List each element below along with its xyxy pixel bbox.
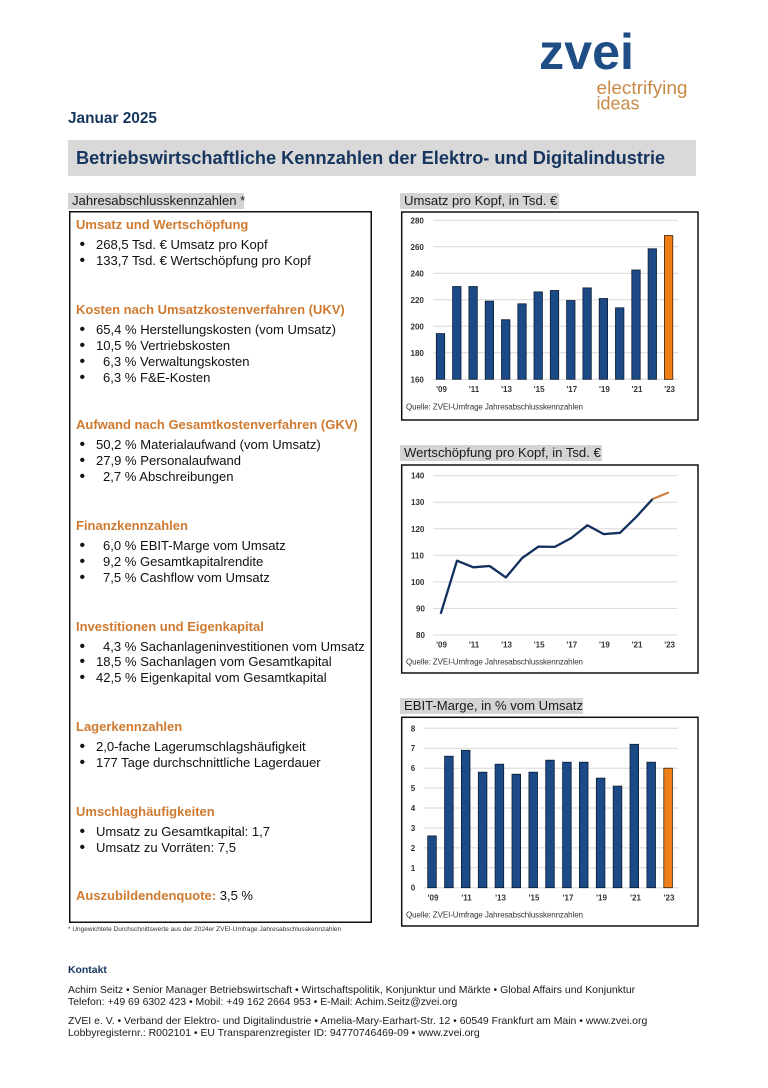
chart: Wertschöpfung pro Kopf line chart: '19 [599,640,610,650]
section: Finanzkennzahlen: 6,0 % EBIT-Marge vom Umsatz [103,538,286,553]
section: Kosten nach Umsatzkostenverfahren: • [80,337,85,354]
chart: EBIT-Marge bar chart: 5 [411,784,416,793]
logo: zvei electrifying ideas: ideas [596,92,640,114]
section: Finanzkennzahlen: 9,2 % Gesamtkapitalrendite [103,554,263,569]
section: Auszubildendenquote: Auszubildendenquote: 3,5 % [76,888,253,903]
section: Kosten nach Umsatzkostenverfahren: • [80,321,85,338]
section: Umsatz und Wertschöpfung: • [80,236,85,253]
chart: EBIT-Marge bar chart: '09 [428,894,439,902]
contact heading: Kontakt [68,965,107,976]
section: Kosten nach Umsatzkostenverfahren: 65,4 % Herstellungskosten (vom Umsatz) [96,322,336,337]
chart: EBIT-Marge bar chart: '21 [630,894,641,902]
chart: EBIT-Marge bar chart [400,716,699,927]
chart: Wertschöpfung pro Kopf line chart: '11 [469,640,480,650]
chart: EBIT-Marge bar chart: 1 [411,864,416,873]
section: Finanzkennzahlen: • [80,537,85,554]
chart: Wertschöpfung pro Kopf line chart: '23 [664,640,676,650]
section: Finanzkennzahlen: 7,5 % Cashflow vom Umsatz [103,570,270,585]
chart: Umsatz pro Kopf bar chart: '21 [632,385,643,394]
chart: EBIT-Marge bar chart: 3 [411,824,416,833]
chart: Umsatz pro Kopf bar chart: '11 [469,385,480,394]
chart: Umsatz pro Kopf bar chart: 240 [410,269,424,278]
section: Umsatz und Wertschöpfung: 133,7 Tsd. € Wertschöpfung pro Kopf [96,253,311,268]
section: Umschlaghäufigkeiten [76,804,270,856]
section: Investitionen und Eigenkapital: Investitionen und Eigenkapital [76,618,264,634]
section: Umschlaghäufigkeiten: • [80,823,85,840]
heading: Umsatz pro Kopf: Umsatz pro Kopf, in Tsd. € [404,193,557,208]
chart: EBIT-Marge bar chart: 4 [411,804,416,813]
section: Finanzkennzahlen: • [80,569,85,586]
section: Kosten nach Umsatzkostenverfahren: Kosten nach Umsatzkostenverfahren (UKV) [76,302,345,317]
section: Umsatz und Wertschöpfung: Umsatz und Wertschöpfung [76,217,248,232]
section: Aufwand nach Gesamtkostenverfahren: Aufwand nach Gesamtkostenverfahren (GKV) [76,417,358,432]
section: Lagerkennzahlen: Lagerkennzahlen [76,719,182,734]
section: Aufwand nach Gesamtkostenverfahren: • [80,436,85,453]
logo: zvei electrifying ideas: zvei [539,24,634,80]
section: Finanzkennzahlen: Finanzkennzahlen [76,518,188,533]
chart: Wertschöpfung pro Kopf line chart: 90 [416,604,425,613]
section: Umschlaghäufigkeiten: • [80,839,85,856]
section: Umschlaghäufigkeiten: Umschlaghäufigkeiten [76,804,215,819]
chart: Umsatz pro Kopf bar chart: 260 [410,243,424,252]
contact details [68,984,635,1008]
chart: Umsatz pro Kopf bar chart: '13 [501,385,512,394]
section: Investitionen und Eigenkapital [76,618,365,686]
chart: Wertschöpfung pro Kopf line chart: '15 [534,640,545,650]
chart: Umsatz pro Kopf bar chart: 200 [410,322,424,331]
chart: Umsatz pro Kopf bar chart: '17 [566,385,578,394]
chart: Wertschöpfung pro Kopf line chart: 140 [411,472,425,481]
section: Lagerkennzahlen: • [80,738,85,755]
chart: EBIT-Marge bar chart: 0 [411,884,416,893]
chart: Wertschöpfung pro Kopf line chart: '21 [632,640,643,650]
organisation details: Lobbyregisternr.: R002101 • EU Transparenzregister ID: 94770746469-09 • www.zvei.org [68,1028,480,1039]
section: Aufwand nach Gesamtkostenverfahren [76,417,358,485]
section: Lagerkennzahlen: • [80,754,85,771]
section: Investitionen und Eigenkapital: 18,5 % Sachanlagen vom Gesamtkapital [96,654,332,669]
chart: Wertschöpfung pro Kopf line chart: 120 [411,525,425,534]
heading: Jahresabschlusskennzahlen: Jahresabschlusskennzahlen * [72,193,245,208]
section: Aufwand nach Gesamtkostenverfahren: • [80,452,85,469]
section: Investitionen und Eigenkapital: • [80,653,85,670]
chart: Wertschöpfung pro Kopf line chart: Quelle: ZVEI-Umfrage Jahresabschlusskennzahlen [406,658,583,666]
section: Aufwand nach Gesamtkostenverfahren: 2,7 % Abschreibungen [103,469,234,484]
section: Lagerkennzahlen [76,719,321,771]
section: Kosten nach Umsatzkostenverfahren: • [80,353,85,370]
section: Aufwand nach Gesamtkostenverfahren: 27,9 % Personalaufwand [96,453,241,468]
chart: EBIT-Marge bar chart: '11 [461,894,472,902]
chart: Umsatz pro Kopf bar chart: 220 [410,296,424,305]
section: Investitionen und Eigenkapital: 4,3 % Sachanlageninvestitionen vom Umsatz [103,638,365,654]
section: Finanzkennzahlen [76,518,286,586]
chart: Umsatz pro Kopf bar chart: '15 [534,385,545,394]
section: Kosten nach Umsatzkostenverfahren: 6,3 % Verwaltungskosten [103,354,250,369]
section: Investitionen und Eigenkapital: • [80,669,85,686]
section: Umschlaghäufigkeiten: Umsatz zu Gesamtkapital: 1,7 [96,824,270,839]
chart: Umsatz pro Kopf bar chart: 280 [410,216,424,225]
section: Kosten nach Umsatzkostenverfahren: • [80,369,85,386]
chart: Wertschöpfung pro Kopf line chart [400,464,699,674]
heading: EBIT-Marge: EBIT-Marge, in % vom Umsatz [404,698,583,713]
contact details: Telefon: +49 69 6302 423 • Mobil: +49 162 2664 953 • E-Mail: Achim.Seitz@zvei.org [68,996,457,1008]
chart: EBIT-Marge bar chart: '19 [596,894,607,902]
chart: Umsatz pro Kopf bar chart: 180 [410,349,424,358]
panel: Jahresabschlusskennzahlen [69,211,372,923]
date: Januar 2025 [68,110,157,127]
section: Umsatz und Wertschöpfung: 268,5 Tsd. € Umsatz pro Kopf [96,237,268,252]
section: Kosten nach Umsatzkostenverfahren: 6,3 % F&E-Kosten [103,370,210,385]
chart: EBIT-Marge bar chart: 2 [411,844,416,853]
section: Lagerkennzahlen: 177 Tage durchschnittliche Lagerdauer [96,755,321,770]
chart: Umsatz pro Kopf bar chart [400,211,699,421]
chart: Umsatz pro Kopf bar chart: '19 [599,385,610,394]
chart: Umsatz pro Kopf bar chart: '09 [436,385,447,394]
heading: Wertschöpfung pro Kopf: Wertschöpfung pro Kopf, in Tsd. € [404,445,601,460]
chart: EBIT-Marge bar chart: '15 [529,894,540,902]
logo: zvei electrifying ideas [539,24,688,114]
chart: EBIT-Marge bar chart: '17 [563,894,574,902]
chart: EBIT-Marge bar chart: '23 [664,894,675,902]
chart: Umsatz pro Kopf bar chart: 160 [410,375,424,384]
chart: Umsatz pro Kopf bar chart: '23 [664,385,676,394]
section: Umsatz und Wertschöpfung: • [80,252,85,269]
section: Aufwand nach Gesamtkostenverfahren: • [80,468,85,485]
logo: zvei electrifying ideas: electrifying [596,77,688,98]
organisation details: ZVEI e. V. • Verband der Elektro- und Digitalindustrie • Amelia-Mary-Earhart-Str. 12 • 60549 Frankfurt am Main • www.zvei.org [68,1016,647,1027]
chart: EBIT-Marge bar chart: Quelle: ZVEI-Umfrage Jahresabschlusskennzahlen [406,910,583,920]
title bar: Betriebswirtschaftliche Kennzahlen der Elektro- und Digitalindustrie [76,148,665,168]
footnote: * Ungewichtete Durchschnittswerte aus der 2024er ZVEI-Umfrage Jahresabschlusskennzahlen [68,926,341,933]
section: Kosten nach Umsatzkostenverfahren: 10,5 % Vertriebskosten [96,338,230,353]
section: Finanzkennzahlen: • [80,553,85,570]
chart: EBIT-Marge bar chart: 7 [411,744,416,753]
chart: EBIT-Marge bar chart: 6 [411,764,416,773]
section: Umsatz und Wertschöpfung [76,217,311,269]
chart: EBIT-Marge bar chart: 8 [411,724,416,733]
chart: Wertschöpfung pro Kopf line chart: '09 [436,640,447,650]
contact details: Achim Seitz • Senior Manager Betriebswirtschaft • Wirtschaftspolitik, Konjunktur und Märkte • Global Affairs und Konjunktur [68,984,635,996]
organisation details [68,1016,647,1039]
section: Kosten nach Umsatzkostenverfahren [76,302,345,386]
section: Umschlaghäufigkeiten: Umsatz zu Vorräten: 7,5 [96,840,236,855]
chart: EBIT-Marge bar chart: '13 [495,894,506,902]
chart: Wertschöpfung pro Kopf line chart: '17 [566,640,578,650]
section: Investitionen und Eigenkapital: 42,5 % Eigenkapital vom Gesamtkapital [96,670,327,685]
chart: Wertschöpfung pro Kopf line chart: '13 [501,640,512,650]
chart: Umsatz pro Kopf bar chart: Quelle: ZVEI-Umfrage Jahresabschlusskennzahlen [406,402,583,412]
chart: Wertschöpfung pro Kopf line chart: 100 [411,578,425,587]
section: Aufwand nach Gesamtkostenverfahren: 50,2 % Materialaufwand (vom Umsatz) [96,437,321,452]
chart: Wertschöpfung pro Kopf line chart: 130 [411,498,425,507]
section: Investitionen und Eigenkapital: • [80,638,85,654]
title bar [68,140,696,176]
section: Lagerkennzahlen: 2,0-fache Lagerumschlagshäufigkeit [96,739,306,754]
chart: Wertschöpfung pro Kopf line chart: 80 [416,631,425,640]
chart: Wertschöpfung pro Kopf line chart: 110 [411,551,424,560]
